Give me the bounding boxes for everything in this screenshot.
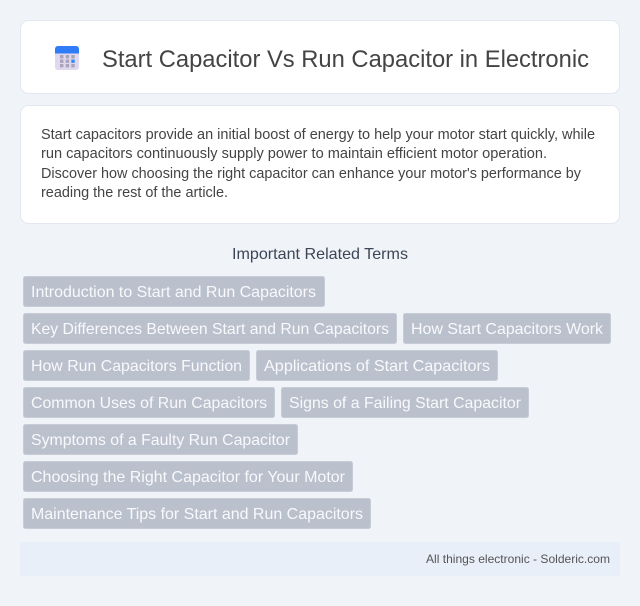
panel: description xyxy=(20,106,620,224)
chip: introduction: Introduction to Start and Run Capacitors xyxy=(31,284,316,301)
chip: choosing: Choosing the Right Capacitor for Your Motor xyxy=(31,469,346,486)
footer xyxy=(20,542,620,576)
chip: common uses xyxy=(24,388,274,418)
chip: common uses: Common Uses of Run Capacitors xyxy=(31,395,267,412)
panel: term chips xyxy=(24,276,610,528)
chip: applications xyxy=(256,350,498,380)
panel: header xyxy=(20,20,620,94)
chip: key differences: Key Differences Between Start and Run Capacitors xyxy=(31,321,389,338)
chip: how start capacitors work: How Start Capacitors Work xyxy=(411,321,604,338)
chip: signs of failing xyxy=(282,388,528,418)
footer: All things electronic - Solderic.com xyxy=(426,552,610,566)
chip: signs of failing: Signs of a Failing Start Capacitor xyxy=(289,395,522,412)
chip: applications: Applications of Start Capacitors xyxy=(264,358,490,375)
text block: description: Discover how choosing the right capacitor can enhance your motor's performance by xyxy=(41,166,582,182)
chip: symptoms xyxy=(24,424,298,454)
title: Start Capacitor Vs Run Capacitor in Electronic xyxy=(102,46,589,73)
chip: maintenance: Maintenance Tips for Start and Run Capacitors xyxy=(31,506,363,523)
text block: description: Start capacitors provide an initial boost of energy to help your motor start quickly, while xyxy=(41,127,595,143)
chip: key differences xyxy=(24,314,396,344)
heading: related terms: Important Related Terms xyxy=(232,246,408,263)
text block: description: run capacitors continuously supply power to maintain efficient motor operation. xyxy=(41,146,547,162)
chip: introduction xyxy=(24,276,324,306)
icon: calendar grid xyxy=(55,46,79,70)
chip: choosing xyxy=(24,462,352,492)
chip: how run capacitors function xyxy=(24,350,250,380)
chip: how start capacitors work xyxy=(404,314,610,344)
text block: description xyxy=(41,127,595,201)
chip: maintenance xyxy=(24,498,370,528)
chip: symptoms: Symptoms of a Faulty Run Capacitor xyxy=(31,432,291,449)
text block: description: reading the rest of the article. xyxy=(41,185,228,201)
chip: how run capacitors function: How Run Capacitors Function xyxy=(31,358,242,375)
